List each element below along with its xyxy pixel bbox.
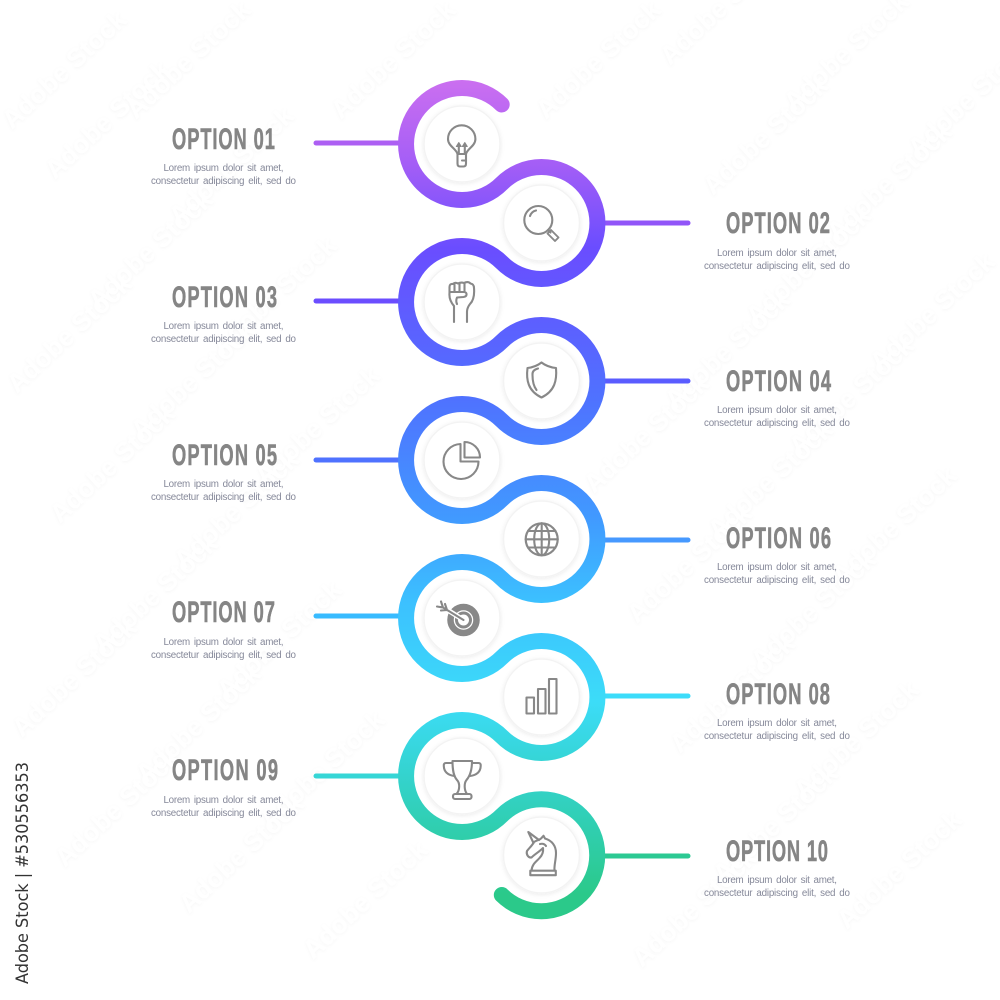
faint stock watermark pattern: Adobe Stock [163, 100, 300, 230]
option 02 text [704, 208, 851, 272]
faint stock watermark pattern: Adobe Stock [864, 246, 1000, 376]
option 01 text: consectetur adipiscing elit, sed do [151, 176, 297, 187]
faint stock watermark pattern: Adobe Stock [707, 758, 844, 888]
faint stock watermark pattern: Adobe Stock [87, 528, 224, 658]
option 07 text [151, 597, 297, 661]
option 05 text: OPTION 05 [172, 440, 277, 472]
option 05 text: Lorem ipsum dolor sit amet, [164, 479, 284, 490]
option 06 text: Lorem ipsum dolor sit amet, [717, 562, 837, 573]
faint stock watermark pattern: Adobe Stock [740, 200, 877, 330]
faint stock watermark pattern: Adobe Stock [831, 804, 968, 934]
faint stock watermark pattern: Adobe Stock [249, 360, 386, 490]
option 03 text: Lorem ipsum dolor sit amet, [164, 321, 284, 332]
option 03 text [151, 282, 297, 345]
option 08 text: OPTION 08 [726, 679, 830, 711]
option 07 text: consectetur adipiscing elit, sed do [151, 650, 297, 661]
connector: option 02 [600, 220, 688, 226]
node discs [424, 106, 580, 893]
option 10 text: Lorem ipsum dolor sit amet, [717, 875, 837, 886]
faint stock watermark pattern: Adobe Stock [621, 498, 758, 628]
faint stock watermark pattern: Adobe Stock [788, 674, 925, 804]
option 06 text: consectetur adipiscing elit, sed do [704, 575, 851, 586]
option 09 text: consectetur adipiscing elit, sed do [151, 808, 297, 819]
faint stock watermark pattern: Adobe Stock [702, 414, 839, 544]
option 10 text [704, 836, 851, 899]
faint stock watermark pattern: Adobe Stock [664, 628, 801, 758]
connector: option 10 [600, 854, 688, 858]
icon: pie chart [444, 442, 480, 479]
option 04 text [704, 366, 851, 429]
option 10 text: consectetur adipiscing elit, sed do [704, 888, 851, 899]
faint stock watermark pattern: Adobe Stock [168, 444, 305, 574]
faint stock watermark pattern: Adobe Stock [745, 544, 882, 674]
connector: option 03 [316, 298, 402, 304]
faint stock watermark pattern: Adobe Stock [82, 184, 219, 314]
faint stock watermark pattern: Adobe Stock [826, 460, 963, 590]
faint stock watermark pattern: Adobe Stock [173, 788, 310, 918]
option 03 text: consectetur adipiscing elit, sed do [151, 334, 297, 345]
icon: trophy [444, 761, 481, 799]
icon: shield [527, 362, 556, 398]
option 07 text: OPTION 07 [172, 597, 275, 629]
option 07 text: Lorem ipsum dolor sit amet, [164, 637, 284, 648]
option 09 text: OPTION 09 [172, 755, 278, 787]
faint stock watermark pattern: Adobe Stock [297, 834, 434, 964]
option 06 text [704, 523, 851, 586]
faint stock watermark pattern: Adobe Stock [254, 704, 391, 834]
faint stock watermark pattern: Adobe Stock [783, 330, 920, 460]
faint stock watermark pattern: Adobe Stock [626, 842, 763, 972]
icon: raised fist [449, 282, 474, 322]
connector: option 07 [316, 614, 402, 618]
option 09 text [151, 755, 297, 819]
faint stock watermark pattern: Adobe Stock [206, 230, 343, 360]
option 01 text: OPTION 01 [172, 124, 275, 156]
option 06 text: OPTION 06 [726, 523, 831, 555]
faint stock watermark pattern: Adobe Stock [1, 268, 138, 398]
faint stock watermark pattern: Adobe Stock [6, 612, 143, 742]
icon: light bulb [448, 125, 475, 166]
faint stock watermark pattern: Adobe Stock [125, 314, 262, 444]
connector: option 05 [316, 458, 402, 462]
faint stock watermark pattern: Adobe Stock [697, 70, 834, 200]
stock id caption: Adobe Stock | #530556353 [13, 762, 32, 984]
option 03 text: OPTION 03 [172, 282, 277, 314]
faint stock watermark pattern: Adobe Stock [49, 742, 186, 872]
connector: option 01 [316, 140, 402, 146]
icon: unicorn chess piece [527, 832, 556, 875]
option 04 text: consectetur adipiscing elit, sed do [704, 418, 851, 429]
faint stock watermark pattern: Adobe Stock [659, 284, 796, 414]
option 08 text: consectetur adipiscing elit, sed do [704, 731, 851, 742]
option 09 text: Lorem ipsum dolor sit amet, [164, 795, 284, 806]
faint stock watermark pattern: Adobe Stock [130, 658, 267, 788]
connector: option 08 [600, 694, 688, 698]
option 02 text: consectetur adipiscing elit, sed do [704, 261, 851, 272]
option 04 text: Lorem ipsum dolor sit amet, [717, 405, 837, 416]
faint stock watermark pattern: Adobe Stock [211, 574, 348, 704]
option 10 text: OPTION 10 [726, 836, 828, 868]
faint stock watermark pattern: Adobe Stock [821, 116, 958, 246]
faint stock watermark pattern: Adobe Stock [578, 368, 715, 498]
connector: option 04 [600, 378, 688, 384]
faint stock watermark pattern: Adobe Stock [39, 54, 176, 184]
icon: target with arrow [437, 602, 476, 633]
connector: option 09 [316, 774, 402, 778]
option 05 text [151, 440, 297, 503]
icon: globe [526, 523, 558, 555]
option 02 text: OPTION 02 [726, 208, 830, 240]
serpentine gradient ribbon [406, 88, 597, 911]
connector: option 06 [600, 538, 688, 542]
faint stock watermark pattern: Adobe Stock [44, 398, 181, 528]
option 01 text: Lorem ipsum dolor sit amet, [164, 163, 284, 174]
option 08 text: Lorem ipsum dolor sit amet, [717, 718, 837, 729]
icon: magnifier [524, 206, 558, 241]
option 04 text: OPTION 04 [726, 366, 831, 398]
option 01 text [151, 124, 297, 187]
option 05 text: consectetur adipiscing elit, sed do [151, 492, 297, 503]
icon: bar chart [526, 679, 556, 714]
option 08 text [704, 679, 851, 742]
option 02 text: Lorem ipsum dolor sit amet, [717, 248, 837, 259]
